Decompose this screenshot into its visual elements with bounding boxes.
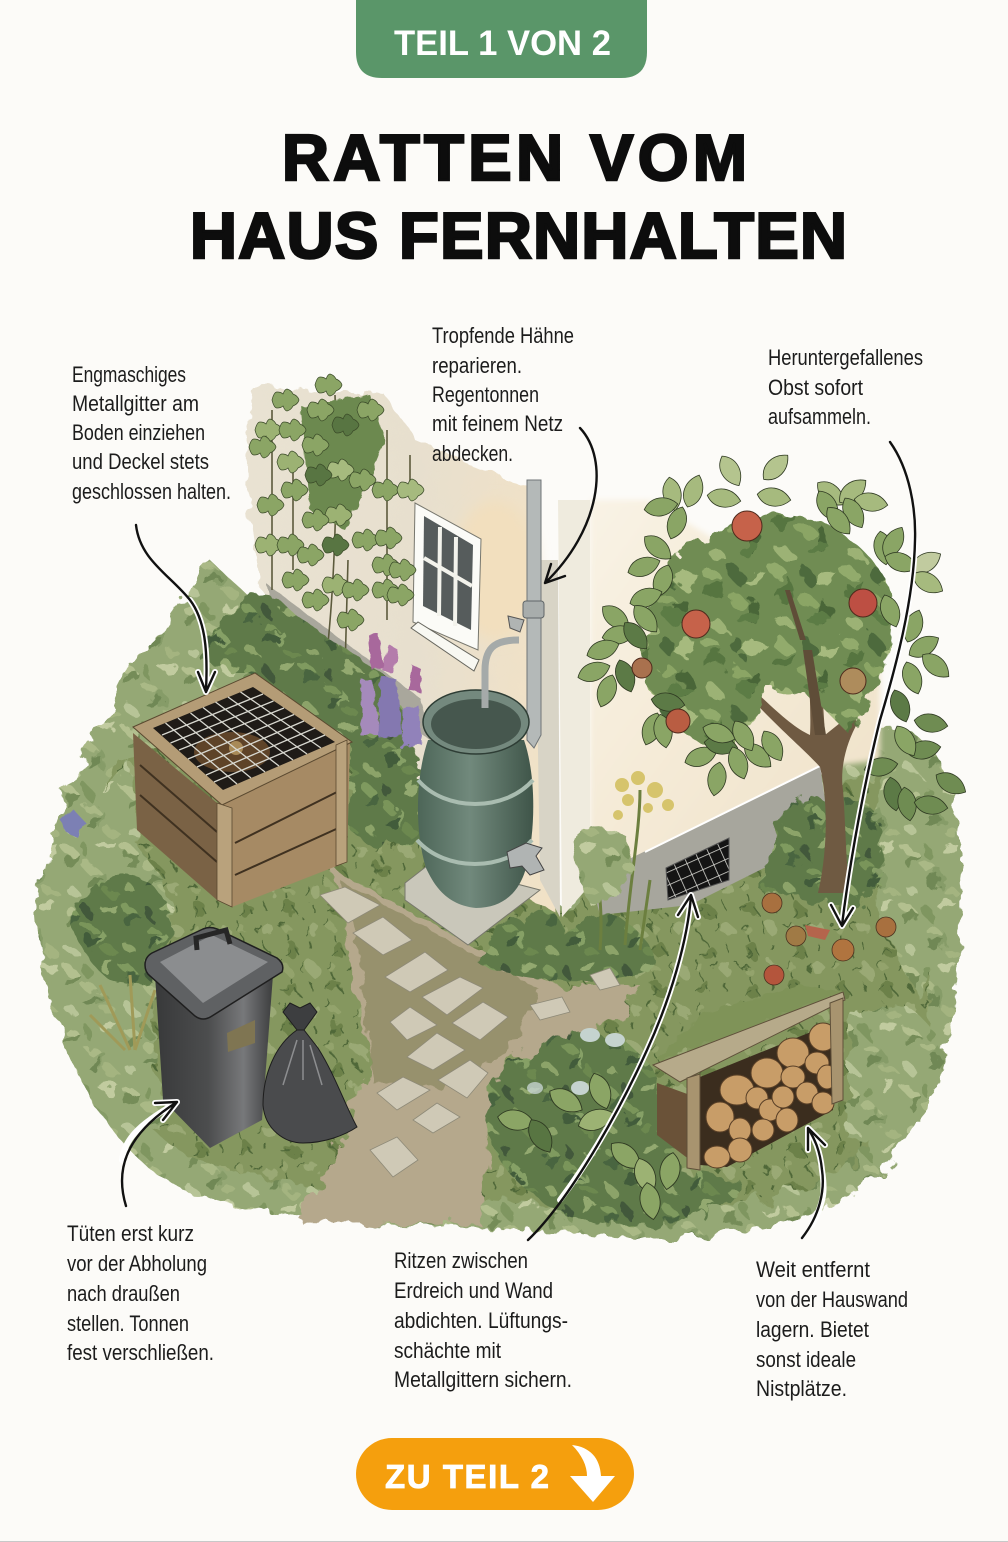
barrel spigot: [507, 843, 544, 875]
callout: firewood: Nistplätze.: [756, 1376, 847, 1401]
callout: compost bin: und Deckel stets: [72, 449, 209, 474]
callout: compost bin: geschlossen halten.: [72, 479, 231, 504]
grass tuft: [90, 975, 155, 1050]
arrow: to vent: [528, 895, 698, 1240]
mossy soil between upper stones: [340, 880, 540, 1090]
wall plinth right: [590, 766, 830, 915]
callout: firewood: [756, 1257, 908, 1401]
woodpile: [653, 985, 845, 1170]
foliage: right bush: [760, 797, 892, 905]
callout: compost bin: [72, 362, 231, 504]
wall corner: [535, 560, 560, 917]
callout: fruit: aufsammeln.: [768, 404, 871, 429]
lilac flowers: [360, 633, 422, 750]
callout: cracks and vents: abdichten. Lüftungs-: [394, 1308, 568, 1333]
garden illustration: [36, 374, 970, 1239]
foliage: behind compost, light: [100, 560, 280, 760]
badge: part 1 of 2: TEIL 1 VON 2: [394, 24, 611, 63]
callout: water: Tropfende Hähne: [432, 323, 574, 348]
ground grass: [70, 660, 936, 1210]
callout: firewood: von der Hauswand: [756, 1287, 908, 1312]
callout: fruit: Obst sofort: [768, 375, 863, 400]
icon: arrow down: [570, 1445, 615, 1502]
window: [411, 503, 481, 671]
peripheral leaves: [575, 449, 970, 822]
arrow: to woodpile: [802, 1128, 825, 1238]
arrow: to fallen fruit: [831, 442, 915, 926]
callout: fruit: Heruntergefallenes: [768, 345, 923, 370]
vine on wall: [249, 374, 424, 670]
button: to part 2: [356, 1438, 634, 1510]
title: [190, 121, 847, 272]
callout: rubbish bags: stellen. Tonnen: [67, 1311, 189, 1336]
trunk and branches: [748, 563, 858, 893]
callout: fruit: [768, 345, 923, 429]
arrow: to compost bin: [136, 525, 215, 692]
callout: firewood: lagern. Bietet: [756, 1317, 869, 1342]
callout: rubbish bags: nach draußen: [67, 1281, 180, 1306]
foliage: left lower pale: [40, 760, 171, 1135]
callout: rubbish bags: Tüten erst kurz: [67, 1221, 194, 1246]
wall plinth left: [268, 585, 430, 740]
foliage: left lower dark: [70, 875, 171, 985]
badge: part 1 of 2: [356, 0, 647, 78]
bottom centre big leaves and pale flowers: [496, 1028, 683, 1221]
callout: water: abdecken.: [432, 441, 513, 466]
callout: rubbish bags: [67, 1221, 214, 1365]
callout: rubbish bags: fest verschließen.: [67, 1340, 214, 1365]
callout: water: [432, 323, 574, 466]
wheelie bin: [145, 928, 283, 1148]
compost bin: [133, 673, 352, 907]
callout: water: mit feinem Netz: [432, 411, 563, 436]
house walls: [245, 385, 880, 917]
right wall: [590, 500, 880, 890]
rain barrel: [405, 616, 544, 945]
garden path soil: [300, 870, 640, 1225]
arrow: to downpipe: [545, 428, 597, 583]
apples: [632, 511, 877, 733]
wall cream wash: [453, 500, 537, 640]
upper trunk over canopy: [785, 590, 826, 735]
title: HAUS FERNHALTEN: [190, 199, 847, 272]
callout: compost bin: Engmaschiges: [72, 362, 186, 387]
foliage: behind compost, dark: [200, 598, 420, 847]
wall tap: [485, 640, 519, 708]
foliage: right pale: [850, 754, 958, 1143]
fallen apples: [762, 893, 896, 985]
canopy mass: [640, 513, 893, 755]
rubbish bag: [263, 1003, 357, 1143]
callout: water: reparieren.: [432, 353, 522, 378]
textured outer halo: [36, 630, 961, 1239]
apple tree: [575, 449, 970, 893]
foliage: centre plants: [480, 771, 674, 981]
vent grille: [666, 838, 729, 900]
callout: firewood: sonst ideale: [756, 1347, 856, 1372]
callout: cracks and vents: Ritzen zwischen: [394, 1248, 528, 1273]
callout: cracks and vents: [394, 1248, 572, 1392]
arrow: to wheelie bin: [122, 1102, 177, 1206]
button: to part 2: ZU TEIL 2: [385, 1458, 549, 1495]
callout: water: Regentonnen: [432, 382, 539, 407]
callout: firewood: Weit entfernt: [756, 1257, 870, 1282]
foliage: bottom centre: [487, 1032, 740, 1225]
callout: rubbish bags: vor der Abholung: [67, 1251, 207, 1276]
downpipe: [523, 480, 544, 748]
left wall: [245, 385, 558, 915]
lilac leaves: [355, 750, 420, 835]
callout: compost bin: Boden einziehen: [72, 420, 205, 445]
callout: cracks and vents: Metallgittern sichern.: [394, 1367, 572, 1392]
path stones: [320, 887, 620, 1177]
title: RATTEN VOM: [282, 121, 747, 194]
callout: compost bin: Metallgitter am: [72, 391, 199, 416]
callout: cracks and vents: Erdreich und Wand: [394, 1278, 553, 1303]
blue flowers: [60, 808, 85, 838]
callout: cracks and vents: schächte mit: [394, 1338, 501, 1363]
